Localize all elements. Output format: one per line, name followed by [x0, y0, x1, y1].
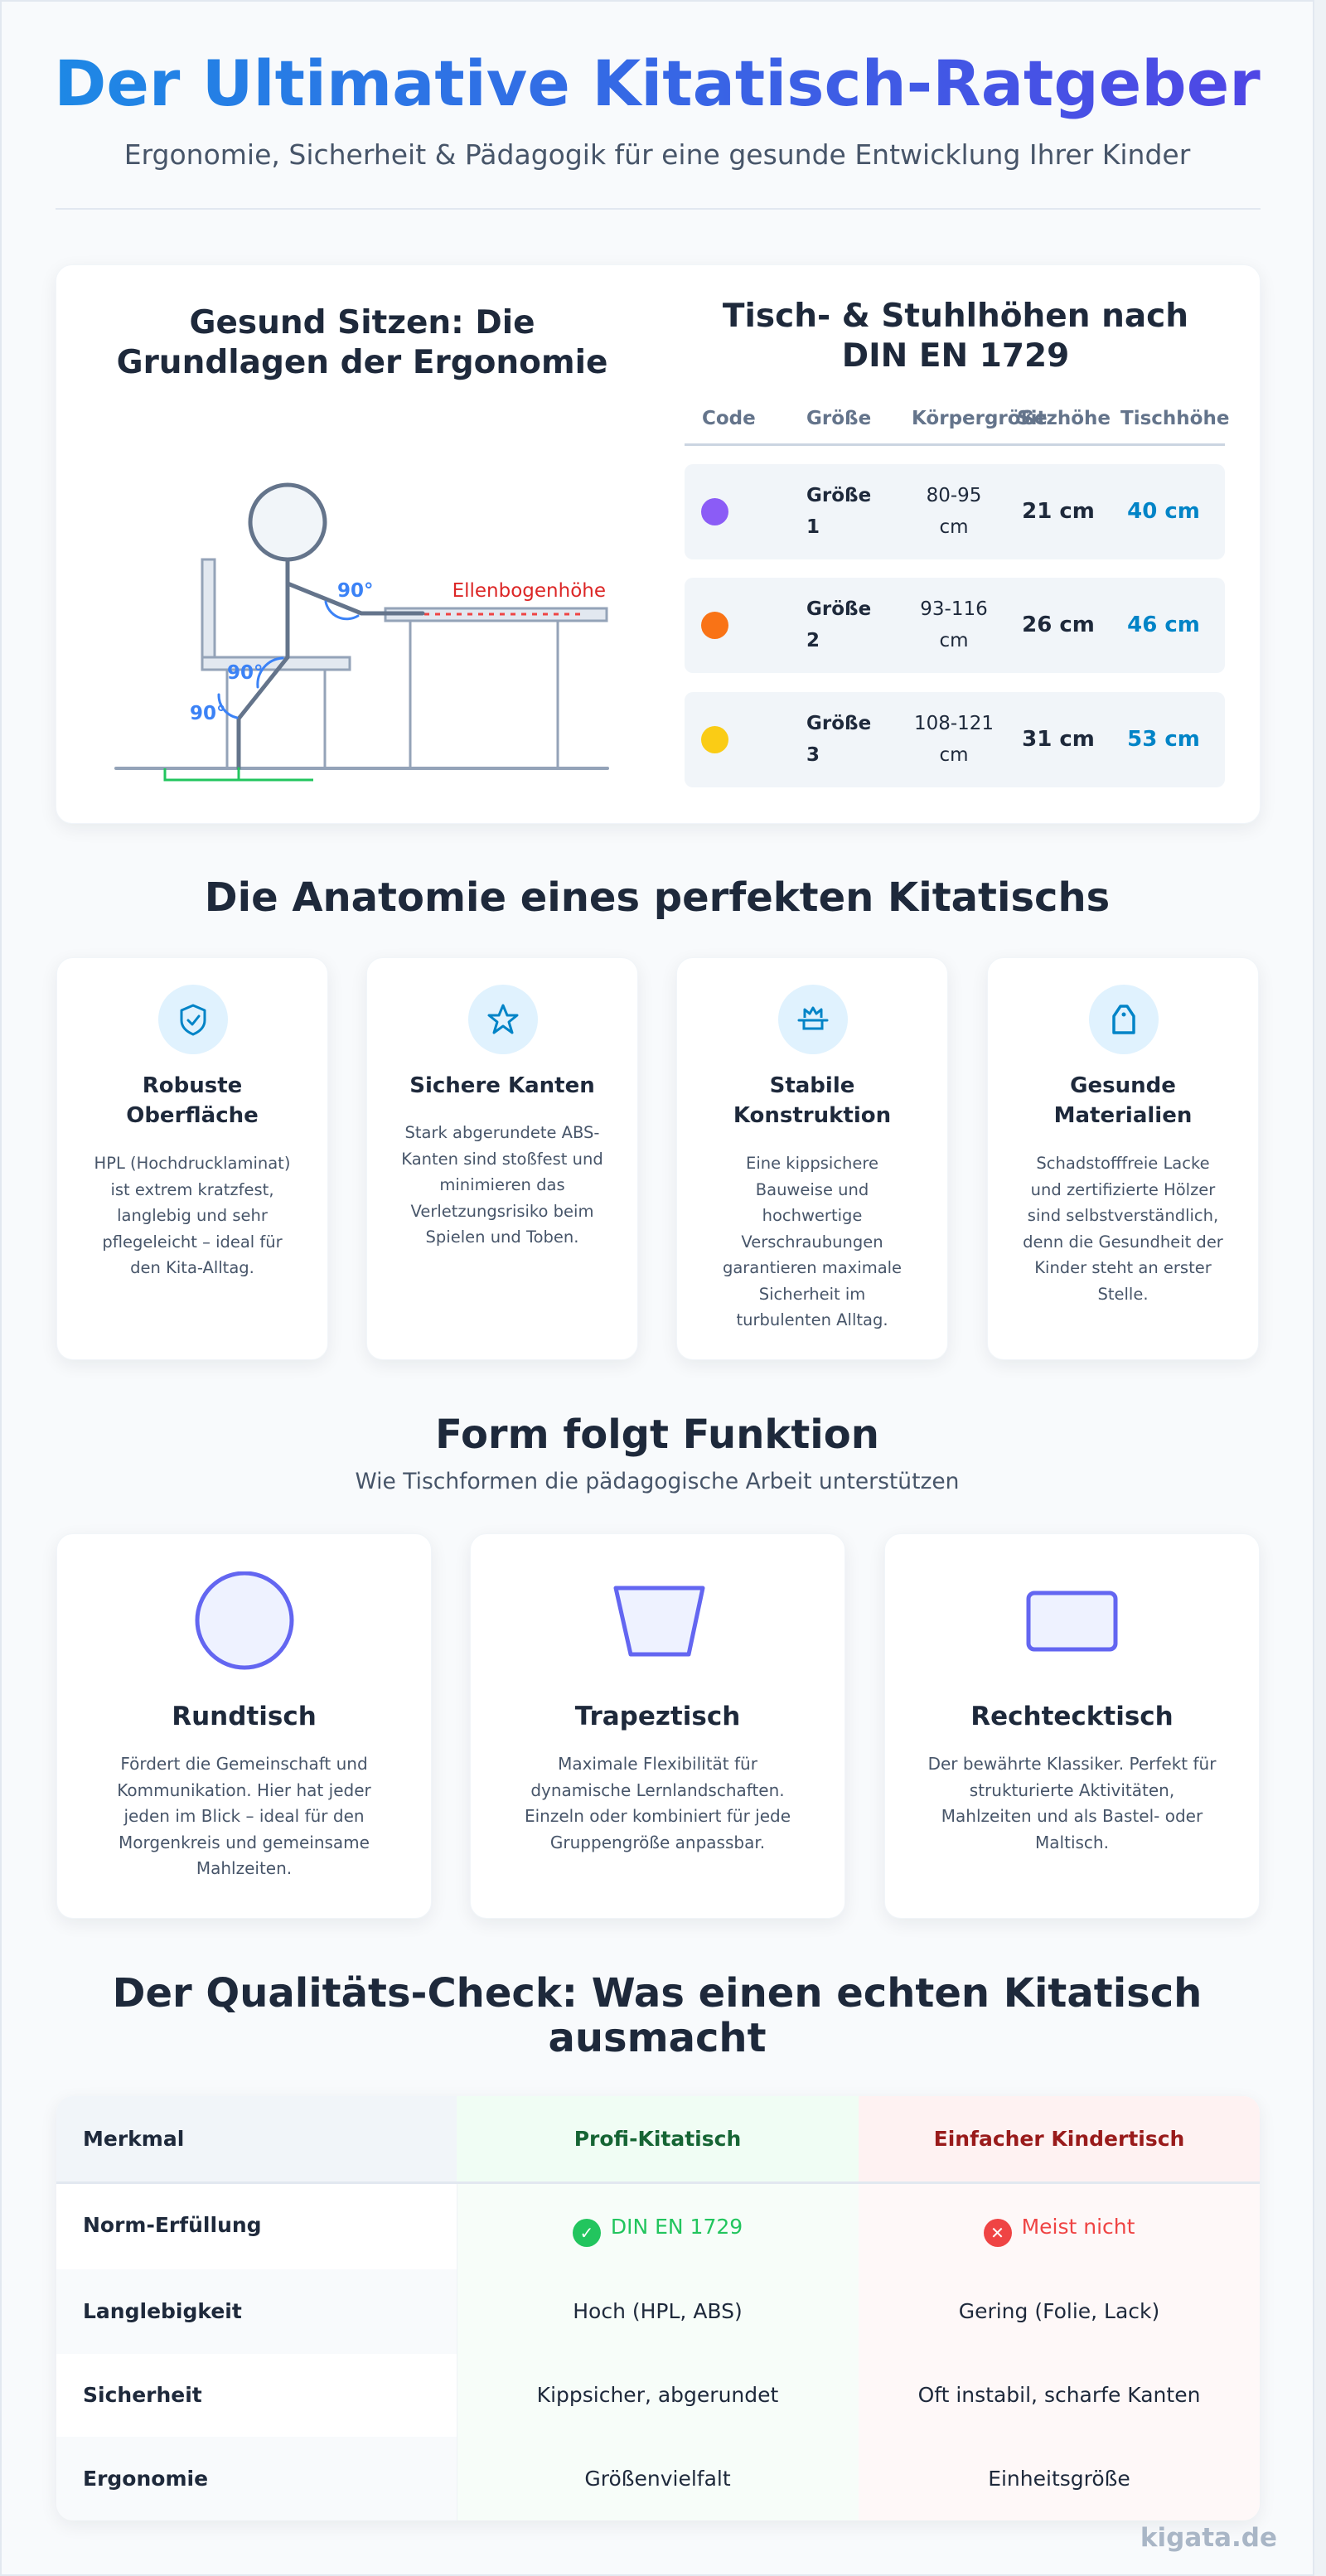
diagram: sitting posture: Ellenbogenhöhe [452, 580, 606, 602]
table text: Ergonomie [83, 2467, 208, 2491]
section heading: Qualitäts-Check: ausmacht [548, 2015, 767, 2061]
card: Gesunde Materialien [987, 957, 1259, 1360]
icon: tag [1089, 985, 1159, 1054]
card: Gesunde Materialien: denn die Gesundheit der [1023, 1232, 1223, 1252]
table text: Kippsicher, abgerundet [537, 2383, 778, 2407]
row: Größe 2: cm [939, 630, 969, 651]
card: Rundtisch: Morgenkreis und gemeinsame [119, 1832, 370, 1852]
card: Gesunde Materialien: Kinder steht an erster [1034, 1258, 1212, 1277]
diagram: sitting posture: 90° [337, 580, 374, 602]
card: Rechtecktisch: Maltisch. [1035, 1832, 1109, 1852]
card: Stabile Konstruktion: Konstruktion [733, 1103, 891, 1128]
table header: heights: Größe [806, 408, 871, 429]
card: Trapeztisch: Trapeztisch [575, 1702, 740, 1731]
card: Gesunde Materialien: Schadstofffreie Lacke [1036, 1154, 1210, 1173]
icon: shield [158, 985, 228, 1054]
card: Stabile Konstruktion: Stabile [770, 1073, 854, 1098]
row: Größe 2: Größe [806, 598, 871, 620]
card: Robuste Oberfläche [56, 957, 328, 1360]
card: Robuste Oberfläche: den Kita-Alltag. [130, 1258, 254, 1277]
table text: DIN EN 1729 [611, 2215, 743, 2239]
row: Größe 1: 40 cm [1127, 499, 1200, 524]
card: Stabile Konstruktion: garantieren maximale [723, 1258, 902, 1277]
card: Sichere Kanten: Sichere Kanten [409, 1073, 595, 1098]
row: Größe 1: cm [939, 516, 969, 538]
heading: Tisch- & Stuhlhöhen: Tisch- & Stuhlhöhen nach [723, 298, 1188, 335]
card: Trapeztisch: dynamische Lernlandschaften. [530, 1780, 785, 1800]
row: Größe 3: 31 cm [1022, 727, 1095, 752]
heading: Gesund Sitzen: Gesund Sitzen: Die [189, 304, 535, 341]
row: Größe 1: 80-95 [927, 485, 981, 506]
row: Größe 1: Größe [806, 485, 871, 506]
icon: star [468, 985, 538, 1054]
heading: Gesund Sitzen [117, 304, 607, 381]
card: Robuste Oberfläche: pflegeleicht – ideal für [102, 1232, 283, 1252]
card: Rechtecktisch: Rechtecktisch [970, 1702, 1174, 1731]
row: Größe 3: cm [939, 744, 969, 766]
table text: ✓ [579, 2223, 593, 2243]
comparison table [56, 2096, 1260, 2520]
card: Stabile Konstruktion: Bauweise und [756, 1180, 869, 1198]
panel: ergonomics and heights [56, 264, 1261, 824]
icon: circle shape [196, 1571, 293, 1669]
icon: construction [778, 985, 848, 1054]
card: Sichere Kanten: Spielen und Toben. [426, 1227, 578, 1247]
table text: Sicherheit [83, 2383, 202, 2407]
table text: Norm-Erfüllung [83, 2213, 262, 2237]
card: Stabile Konstruktion [676, 957, 948, 1360]
card: Rechtecktisch: strukturierte Aktivitäten, [970, 1780, 1174, 1800]
table text: Profi-Kitatisch [574, 2127, 741, 2151]
table text: Größenvielfalt [584, 2467, 731, 2491]
card: Rundtisch [56, 1533, 432, 1919]
table header: heights: Körpergröße [912, 408, 1048, 429]
table text: Oft instabil, scharfe Kanten [918, 2383, 1200, 2407]
diagram: sitting posture [114, 482, 609, 781]
table text: Hoch (HPL, ABS) [573, 2299, 743, 2323]
card: Robuste Oberfläche: Oberfläche [126, 1103, 259, 1128]
row: Größe 3: 3 [806, 744, 820, 766]
card: Robuste Oberfläche: ist extrem kratzfest, [110, 1180, 274, 1198]
row: Größe 2: 93-116 [920, 598, 988, 620]
card: Stabile Konstruktion: Verschraubungen [741, 1232, 883, 1252]
table text: Merkmal [83, 2127, 184, 2151]
card: Sichere Kanten: Stark abgerundete ABS- [405, 1123, 599, 1142]
card: Sichere Kanten: minimieren das [439, 1175, 565, 1194]
card: Robuste Oberfläche: Robuste [143, 1073, 242, 1098]
subtitle: Ergonomie, Sicherheit & Pädagogik für eine gesunde Entwicklung Ihrer Kinder [124, 138, 1190, 171]
card: Gesunde Materialien: Stelle. [1097, 1285, 1149, 1303]
table text [83, 2127, 1200, 2491]
section subtitle: Wie Tischformen die pädagogische Arbeit unterstützen [355, 1469, 959, 1494]
table text: Meist nicht [1022, 2215, 1135, 2239]
card: Trapeztisch: Maximale Flexibilität für [558, 1754, 757, 1774]
card: Sichere Kanten [366, 957, 638, 1360]
row: Größe 2: 2 [806, 630, 820, 651]
section heading: Anatomie: Die Anatomie eines perfekten Kitatischs [205, 874, 1110, 921]
card: Rundtisch: Rundtisch [172, 1702, 317, 1731]
card: Stabile Konstruktion: Eine kippsichere [746, 1154, 878, 1173]
section heading: Qualitäts-Check [113, 1970, 1202, 2061]
card: Sichere Kanten: Verletzungsrisiko beim [411, 1202, 593, 1220]
row: Größe 2 [685, 578, 1225, 673]
row: Größe 3: 53 cm [1127, 727, 1200, 752]
diagram: sitting posture: 90° [190, 703, 226, 724]
icon: rectangle shape [1026, 1591, 1117, 1651]
card: Rundtisch: Mahlzeiten. [196, 1858, 292, 1878]
section heading: Form folgt Funktion: Form folgt Funktion [435, 1411, 879, 1458]
heading: Tisch- & Stuhlhöhen [723, 298, 1188, 375]
row: Größe 2: 26 cm [1022, 613, 1095, 637]
card: Trapeztisch: Gruppengröße anpassbar. [550, 1832, 765, 1852]
card: Gesunde Materialien: sind selbstverständlich, [1028, 1206, 1218, 1225]
row: Größe 3 [685, 692, 1225, 787]
row: Größe 1 [685, 464, 1225, 559]
table header: heights [685, 408, 1229, 446]
title: Der Ultimative Kitatisch-Ratgeber [54, 46, 1261, 120]
row: Größe 2: 46 cm [1127, 613, 1200, 637]
card: Rundtisch: jeden im Blick – ideal für den [123, 1806, 365, 1826]
section heading: Qualitäts-Check: Der Qualitäts-Check: Was einen echten Kitatisch [113, 1970, 1202, 2017]
card: Gesunde Materialien: Materialien [1054, 1103, 1192, 1128]
card: Stabile Konstruktion: hochwertige [762, 1206, 862, 1225]
row: Größe 3: Größe [806, 713, 871, 734]
table text: Einheitsgröße [988, 2467, 1130, 2491]
row: Größe 1: 1 [806, 516, 820, 538]
card: Rundtisch: Fördert die Gemeinschaft und [120, 1754, 368, 1774]
card: Gesunde Materialien: Gesunde [1070, 1073, 1176, 1098]
row: Größe 1: 21 cm [1022, 499, 1095, 524]
card: Trapeztisch: Einzeln oder kombiniert für jede [525, 1806, 791, 1826]
card: Rechtecktisch [884, 1533, 1260, 1919]
heading: Tisch- & Stuhlhöhen: DIN EN 1729 [842, 337, 1069, 375]
table header: heights: Sitzhöhe [1017, 408, 1111, 429]
card: Stabile Konstruktion: Sicherheit im [759, 1285, 865, 1303]
footer brand: kigata.de [1140, 2523, 1277, 2553]
table text: ✕ [990, 2223, 1004, 2243]
card: Rundtisch: Kommunikation. Hier hat jeder [117, 1780, 371, 1800]
table header: heights: Code [702, 408, 756, 429]
card: Rechtecktisch: Mahlzeiten und als Bastel- oder [941, 1806, 1203, 1826]
card: Stabile Konstruktion: turbulenten Alltag. [736, 1310, 888, 1329]
heading: Gesund Sitzen: Grundlagen der Ergonomie [117, 344, 607, 381]
card: Gesunde Materialien: und zertifizierte Hölzer [1031, 1180, 1215, 1198]
card: Sichere Kanten: Kanten sind stoßfest und [401, 1149, 603, 1169]
table header: heights: Tischhöhe [1120, 408, 1229, 429]
icon: trapezoid shape [613, 1586, 704, 1656]
card: Robuste Oberfläche: HPL (Hochdrucklaminat) [94, 1154, 290, 1173]
table text: Gering (Folie, Lack) [959, 2299, 1159, 2323]
card: Trapeztisch [470, 1533, 845, 1919]
card: Robuste Oberfläche: langlebig und sehr [117, 1206, 268, 1225]
table text: Einfacher Kindertisch [934, 2127, 1184, 2151]
card: Rechtecktisch: Der bewährte Klassiker. Perfekt für [928, 1754, 1216, 1774]
diagram: sitting posture: 90° [227, 662, 264, 684]
table text: Langlebigkeit [83, 2299, 242, 2323]
row: Größe 3: 108-121 [914, 713, 994, 734]
